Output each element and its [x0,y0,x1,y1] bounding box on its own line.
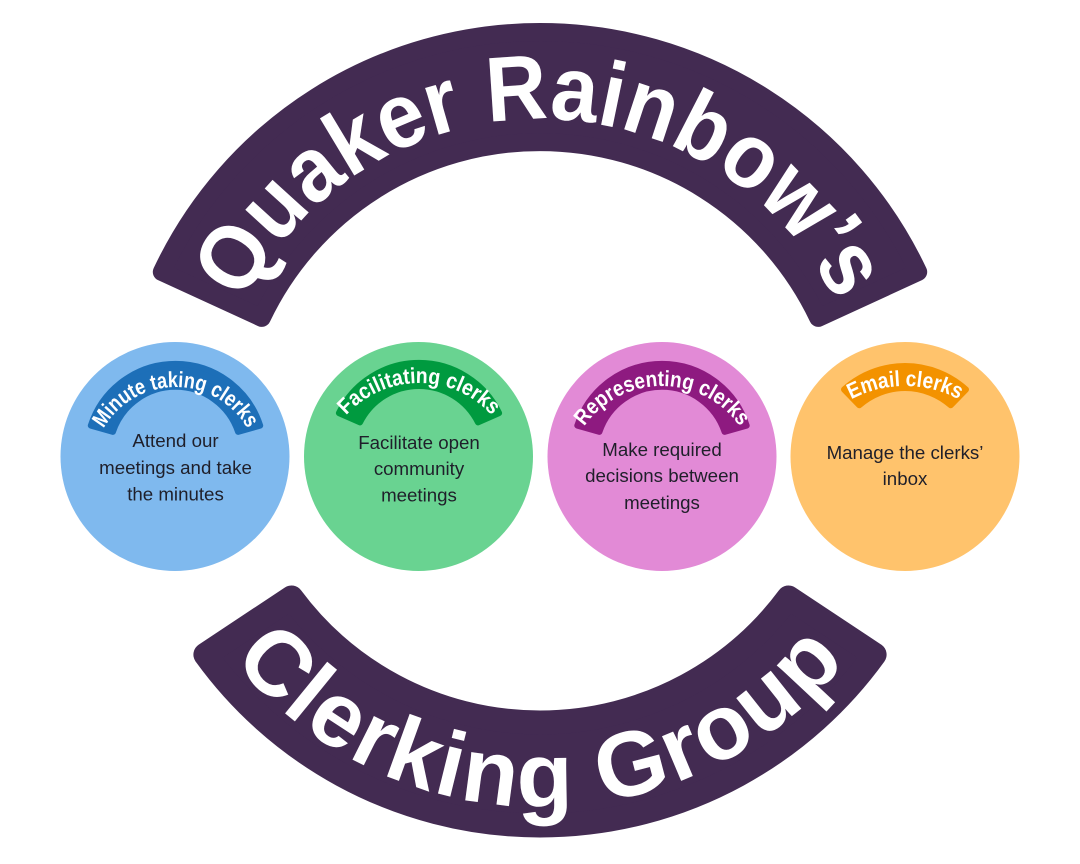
panel: Minute taking clerks: the minutes [127,484,224,504]
panel: Facilitating clerks: meetings [381,484,457,506]
panel: Email clerks [790,342,1020,571]
panel: Email clerks: Manage the clerks’ [827,442,983,463]
bottom arc banner: Clerking Group: Clerking Group [246,630,837,826]
panel: Minute taking clerks: Attend our [132,430,219,451]
panel: Email clerks: Email clerks [846,370,962,399]
panel: Representing clerks: decisions between [585,465,739,486]
panel: Representing clerks: meetings [624,492,700,513]
panel: Representing clerks: Representing clerks [573,370,748,426]
panel: Facilitating clerks [304,342,533,571]
panel: Minute taking clerks: meetings and take [99,457,252,478]
panel: Minute taking clerks [60,342,290,571]
panel: Facilitating clerks: community [374,458,465,479]
panel: Representing clerks: Make required [602,439,722,460]
panel: Representing clerks [548,342,776,571]
panel: Facilitating clerks: Facilitating clerks [336,367,498,414]
top arc banner: Quaker Rainbow's: Quaker Rainbow’s [200,56,872,294]
panel: Facilitating clerks: Facilitate open [358,432,480,453]
panel: Minute taking clerks: Minute taking clerks [92,371,256,428]
panel: Email clerks: inbox [883,468,928,489]
